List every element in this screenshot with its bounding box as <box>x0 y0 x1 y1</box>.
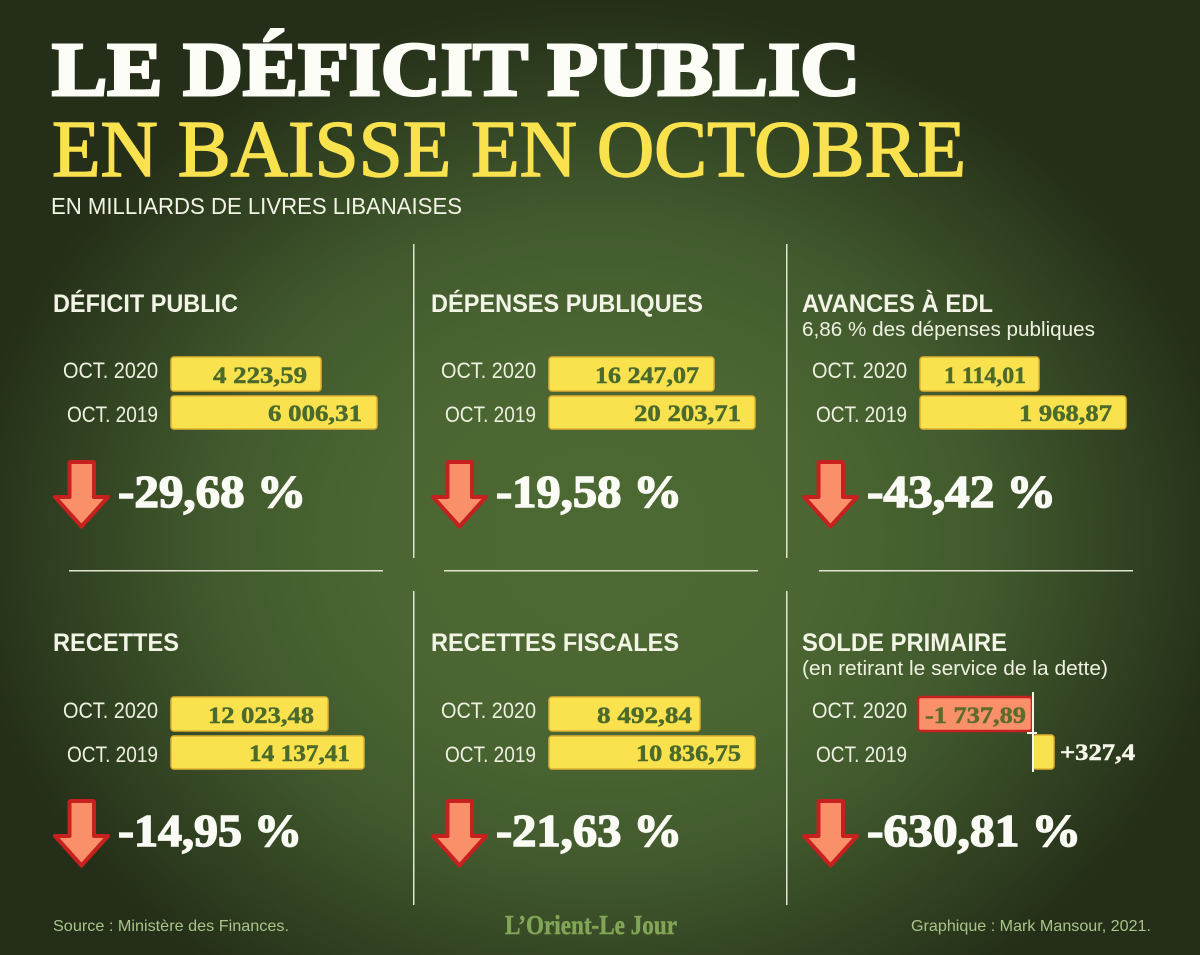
panel: recettes fiscales: RECETTES FISCALES <box>431 629 679 657</box>
panel: solde primaire: OCT. 2019 <box>816 742 907 767</box>
panel: solde primaire <box>802 629 1136 866</box>
panel: dépenses publiques <box>431 289 755 526</box>
panel: avances à EDL: AVANCES À EDL <box>802 289 993 318</box>
panel: solde primaire: SOLDE PRIMAIRE <box>802 629 1007 657</box>
panel: recettes fiscales <box>431 629 755 866</box>
panel: avances à EDL: 6,86 % des dépenses publiques <box>802 319 1095 341</box>
panel: dépenses publiques: -19,58 % <box>496 466 682 517</box>
panel: recettes: OCT. 2020 <box>63 698 158 723</box>
panel: recettes fiscales: 10 836,75 <box>636 741 741 766</box>
panel: dépenses publiques: OCT. 2020 <box>441 358 536 383</box>
panel: déficit public: 4 223,59 <box>213 363 307 388</box>
panel: déficit public: 6 006,31 <box>268 401 362 426</box>
panel: recettes fiscales: 8 492,84 <box>597 703 693 728</box>
panel: avances à EDL: -43,42 % <box>867 466 1056 517</box>
panel: dépenses publiques: OCT. 2019 <box>445 402 536 427</box>
panel: déficit public: DÉFICIT PUBLIC <box>53 289 238 318</box>
panel: avances à EDL: 1 968,87 <box>1019 401 1112 426</box>
panel: déficit public: -29,68 % <box>118 466 306 517</box>
panel: déficit public: OCT. 2019 <box>67 402 158 427</box>
panel: avances à EDL: 1 114,01 <box>944 363 1026 388</box>
panel: solde primaire: -1 737,89 <box>925 703 1026 728</box>
panel: recettes: RECETTES <box>53 629 179 657</box>
credit: Graphique : Mark Mansour, 2021. <box>911 918 1151 935</box>
panel: déficit public: OCT. 2020 <box>63 358 158 383</box>
panel: recettes fiscales: -21,63 % <box>496 805 682 856</box>
panel: solde primaire: -630,81 % <box>867 805 1081 856</box>
title <box>51 28 966 219</box>
panel: recettes <box>53 629 364 866</box>
panel: recettes: -14,95 % <box>118 805 302 856</box>
panel: dépenses publiques: 20 203,71 <box>634 401 741 426</box>
panel: avances à EDL: OCT. 2020 <box>812 358 907 383</box>
panel: dépenses publiques: DÉPENSES PUBLIQUES <box>431 289 703 318</box>
panel: recettes: 12 023,48 <box>208 703 314 728</box>
logo: L'Orient-Le Jour: L’Orient-Le Jour <box>505 910 677 940</box>
source: Source : Ministère des Finances. <box>53 918 289 935</box>
panel: recettes fiscales: OCT. 2020 <box>441 698 536 723</box>
title: EN MILLIARDS DE LIVRES LIBANAISES <box>51 193 462 219</box>
panel: recettes fiscales: OCT. 2019 <box>445 742 536 767</box>
panel: solde primaire: +327,4 <box>1060 740 1136 765</box>
panel: recettes: OCT. 2019 <box>67 742 158 767</box>
title: EN BAISSE EN OCTOBRE <box>52 106 966 194</box>
panel: recettes: 14 137,41 <box>249 741 350 766</box>
panel: avances à EDL <box>802 289 1126 526</box>
panel: avances à EDL: OCT. 2019 <box>816 402 907 427</box>
panel: déficit public <box>53 289 377 526</box>
panel: solde primaire: OCT. 2020 <box>812 698 907 723</box>
panel: dépenses publiques: 16 247,07 <box>595 363 699 388</box>
panel: solde primaire: (en retirant le service de la dette) <box>802 658 1108 680</box>
title: LE DÉFICIT PUBLIC <box>52 28 860 112</box>
